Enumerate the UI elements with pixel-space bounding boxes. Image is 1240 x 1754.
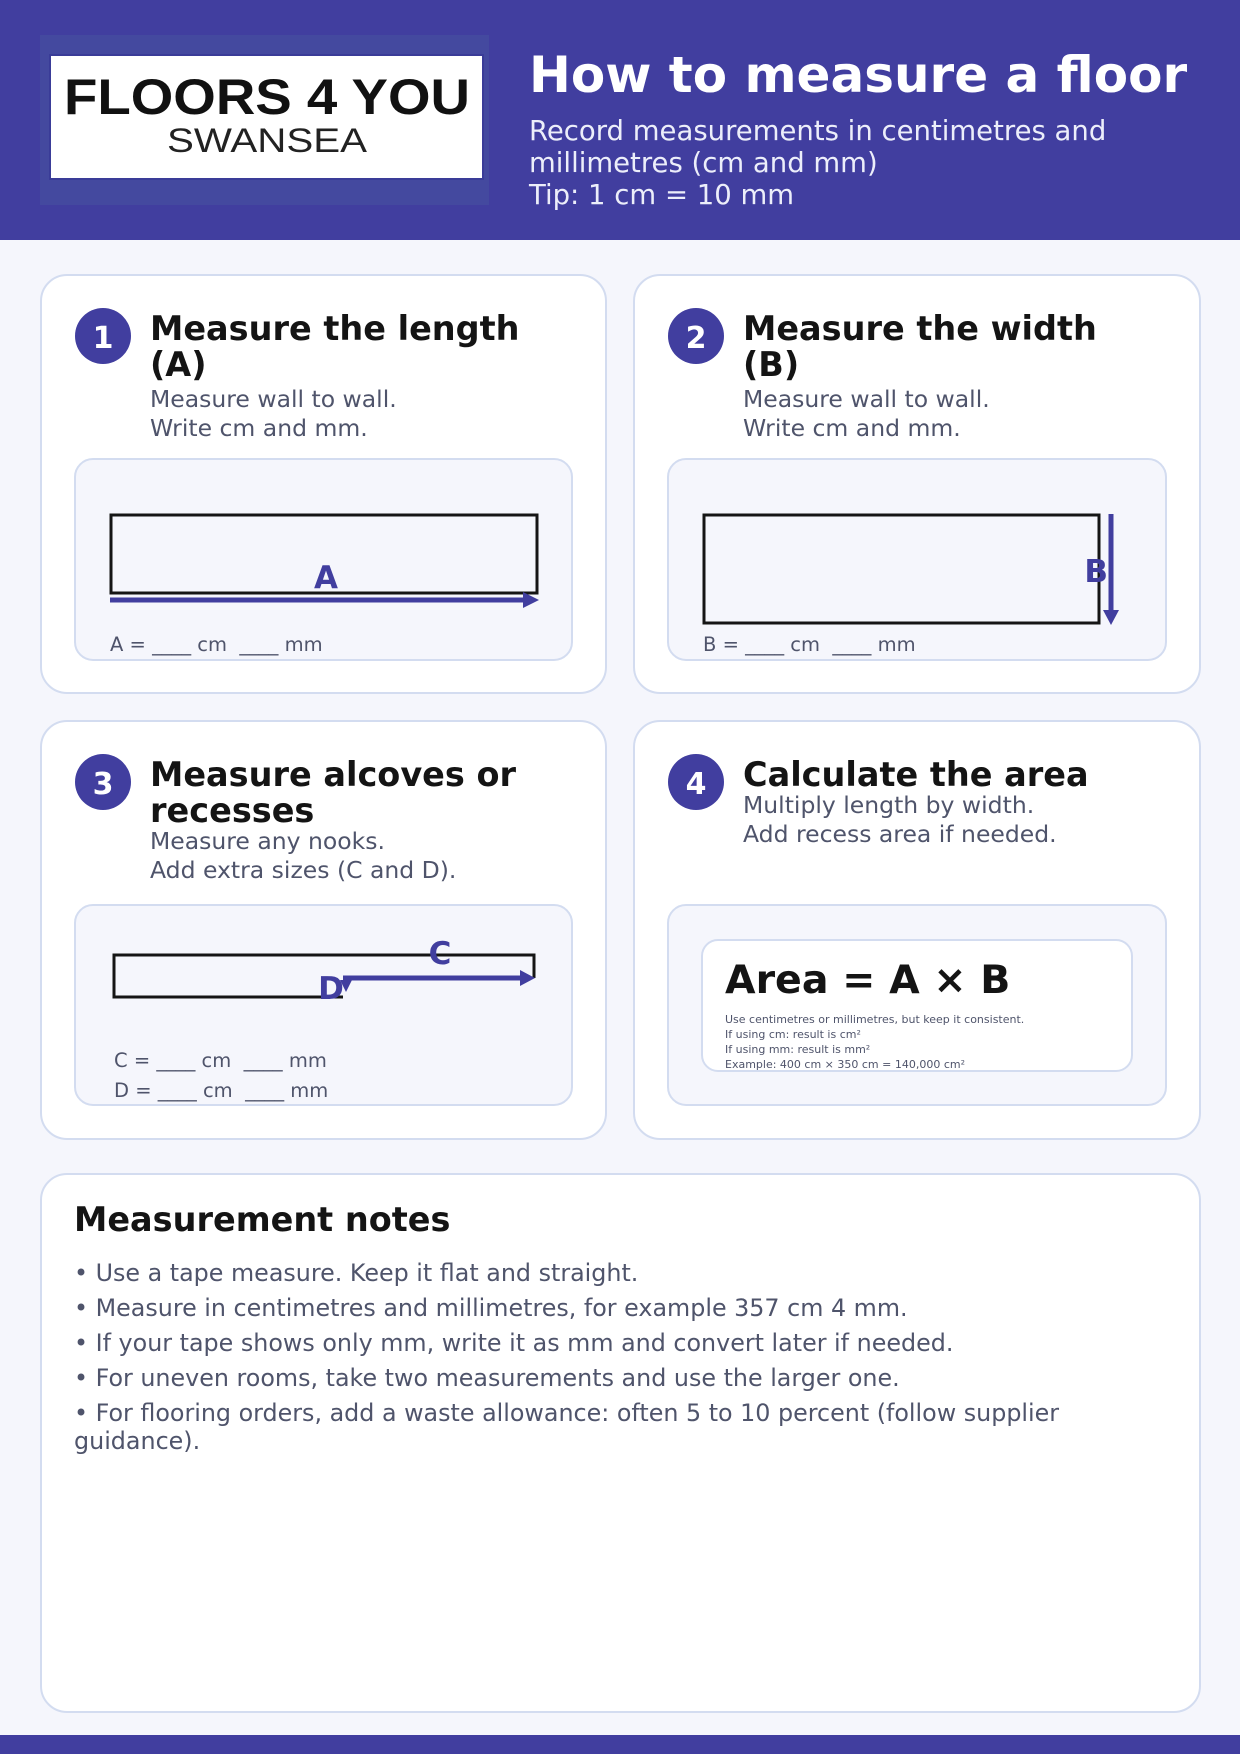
footer bar [0,1735,1240,1754]
panel: step 2 width [634,275,1200,693]
diagram: recess: C = ____ cm ____ mm [114,1049,327,1072]
heading [150,309,520,384]
diagram: width [668,459,1166,660]
description: Multiply length by width. [743,791,1034,819]
notes list [74,1259,1059,1455]
diagram: length [75,459,572,660]
subtitle: Record measurements in centimetres and [529,115,1106,147]
icon: number 2 [668,308,724,364]
diagram: recess: D [318,971,344,1007]
header banner [0,0,1240,240]
formula box: If using mm: result is mm² [725,1043,870,1056]
description [743,385,990,442]
notes list: guidance). [74,1427,200,1455]
diagram: recess: C [429,936,451,972]
diagram: length: A [314,560,338,596]
icon: number 3 [75,754,131,810]
heading: Measure the width [743,309,1097,348]
description: Add extra sizes (C and D). [150,856,456,884]
diagram: length: A = ____ cm ____ mm [110,633,323,656]
icon: number 2: 2 [686,321,706,356]
description: Measure any nooks. [150,827,385,855]
panel: step 3 alcoves [41,721,606,1139]
heading: Calculate the area [743,755,1089,794]
icon: number 1: 1 [93,321,113,356]
notes heading: Measurement notes [74,1200,450,1239]
formula box: Use centimetres or millimetres, but keep it consistent. [725,1013,1024,1026]
description: Measure wall to wall. [743,385,990,413]
icon: number 1 [75,308,131,364]
title: How to measure a floor [529,46,1187,104]
notes list: • For flooring orders, add a waste allowance: often 5 to 10 percent (follow supplier [74,1399,1059,1427]
diagram: recess [75,905,572,1105]
notes list: • Use a tape measure. Keep it flat and straight. [74,1259,638,1287]
description [150,385,397,442]
heading: Measure alcoves or [150,755,516,794]
panel: step 4 area [634,721,1200,1139]
icon: number 4 [668,754,724,810]
formula box: If using cm: result is cm² [725,1028,861,1041]
panel: measurement notes [41,1174,1200,1712]
description: Measure wall to wall. [150,385,397,413]
icon: number 3: 3 [93,767,113,802]
diagram: recess: D = ____ cm ____ mm [114,1079,328,1102]
notes list: • For uneven rooms, take two measurements and use the larger one. [74,1364,900,1392]
diagram: width: B [1084,554,1108,590]
subtitle [528,115,1106,211]
heading: Measure the length [150,309,520,348]
description: Write cm and mm. [743,414,961,442]
formula box [668,905,1166,1105]
panel: step 1 length [41,275,606,693]
heading [150,755,516,830]
formula box: Area = A × B [725,957,1010,1003]
diagram: width: B = ____ cm ____ mm [703,633,916,656]
notes list: • Measure in centimetres and millimetres, for example 357 cm 4 mm. [74,1294,908,1322]
description: Add recess area if needed. [743,820,1057,848]
heading [743,309,1097,384]
logo: FLOORS 4 YOU [64,69,470,125]
logo: SWANSEA [167,122,367,160]
subtitle: Tip: 1 cm = 10 mm [528,179,794,211]
formula box: Example: 400 cm × 350 cm = 140,000 cm² [725,1058,965,1071]
description [743,791,1057,848]
heading: (A) [150,345,207,384]
logo [40,35,489,205]
subtitle: millimetres (cm and mm) [529,147,878,179]
description: Write cm and mm. [150,414,368,442]
icon: number 4: 4 [686,767,706,802]
heading: recesses [150,791,314,830]
heading: (B) [743,345,799,384]
notes list: • If your tape shows only mm, write it as mm and convert later if needed. [74,1329,953,1357]
description [150,827,456,884]
